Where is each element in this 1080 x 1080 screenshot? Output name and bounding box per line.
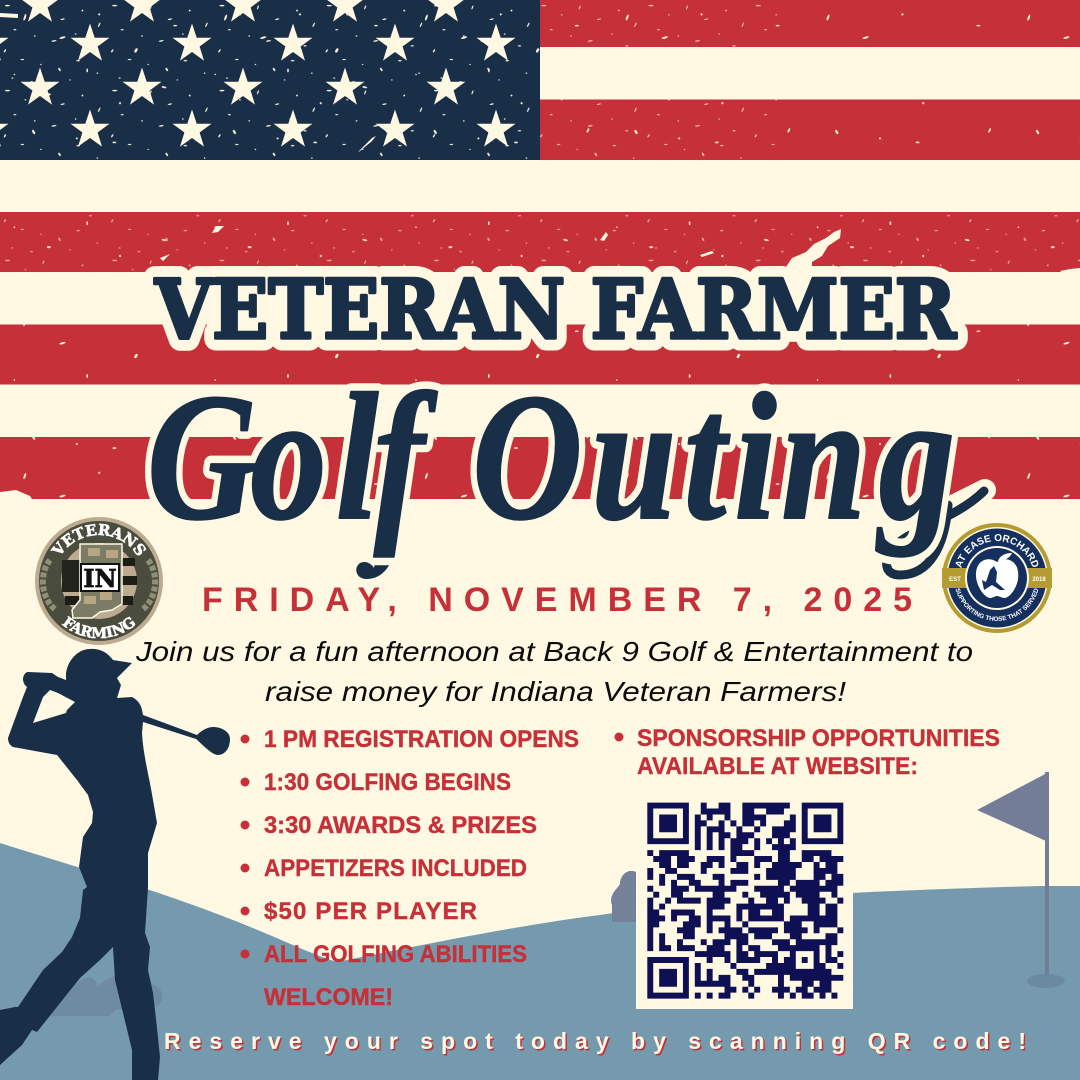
background tree left	[50, 975, 162, 1016]
date: FRIDAY, NOVEMBER 7, 2025	[202, 581, 912, 619]
event details list: WELCOME!	[264, 984, 393, 1011]
heading: veteran farmer: VETERAN FARMER	[154, 263, 957, 358]
logo: at ease orchard: EST	[949, 577, 961, 583]
sponsorship text: SPONSORSHIP OPPORTUNITIES	[637, 725, 1000, 752]
logo wreath	[43, 560, 155, 610]
reserve call to action: Reserve your spot today by scanning QR code!	[164, 1028, 1026, 1054]
logo: veterans in farming: IN	[83, 564, 117, 593]
golfer silhouette	[0, 649, 230, 1080]
logo: at ease orchard: SUPPORTING THOSE THAT SERVED	[956, 588, 1038, 621]
logo: veterans in farming: FARMING	[62, 616, 136, 638]
event details list: 1:30 GOLFING BEGINS	[264, 769, 511, 796]
logo ring text: VETERANS	[50, 524, 146, 556]
flag stripes	[0, 0, 1080, 499]
flag pennant	[977, 772, 1049, 842]
intro text	[135, 636, 973, 707]
intro text: raise money for Indiana Veteran Farmers!	[265, 676, 846, 707]
flag canton	[0, 0, 540, 160]
flag cup	[1027, 974, 1065, 988]
logo: veterans in farming	[35, 517, 163, 645]
logo: at ease orchard: 2018	[1032, 577, 1046, 583]
hills	[0, 843, 1080, 1080]
qr code card	[636, 790, 853, 1009]
sponsorship text: AVAILABLE AT WEBSITE:	[637, 753, 918, 780]
flag stars	[0, 0, 516, 147]
logo apple icon	[976, 559, 1018, 598]
heading: golf outing: Golf Outing	[147, 357, 955, 558]
logo side band	[942, 568, 1052, 588]
event details list: ALL GOLFING ABILITIES	[264, 941, 527, 968]
sponsorship text	[614, 725, 1000, 780]
swash outline on g	[955, 490, 985, 505]
logo indiana shape	[72, 544, 122, 618]
golf flag	[977, 772, 1065, 988]
flag pole	[1045, 772, 1049, 975]
background tree right	[611, 871, 636, 922]
f and g descender swashes	[356, 540, 397, 579]
event details list: APPETIZERS INCLUDED	[264, 855, 527, 882]
qr code	[647, 806, 843, 996]
logo IN badge	[81, 564, 119, 591]
logo inner flag	[61, 543, 137, 619]
flag distress texture	[0, 0, 1080, 499]
heading: veteran farmer: VETERAN FARMER	[154, 263, 957, 358]
event details list: $50 PER PLAYER	[264, 898, 477, 925]
event details list: 1 PM REGISTRATION OPENS	[264, 726, 579, 753]
heading: golf outing: Golf Outing	[147, 357, 955, 558]
event details list: 3:30 AWARDS & PRIZES	[264, 812, 537, 839]
event details list	[240, 726, 579, 1011]
reserve call to action: Reserve your spot today by scanning QR code!	[166, 1030, 1028, 1056]
intro text: Join us for a fun afternoon at Back 9 Golf & Entertainment to	[135, 636, 973, 667]
logo ring text: AT EASE ORCHARD	[956, 534, 1038, 568]
logo: at ease orchard	[942, 523, 1052, 633]
